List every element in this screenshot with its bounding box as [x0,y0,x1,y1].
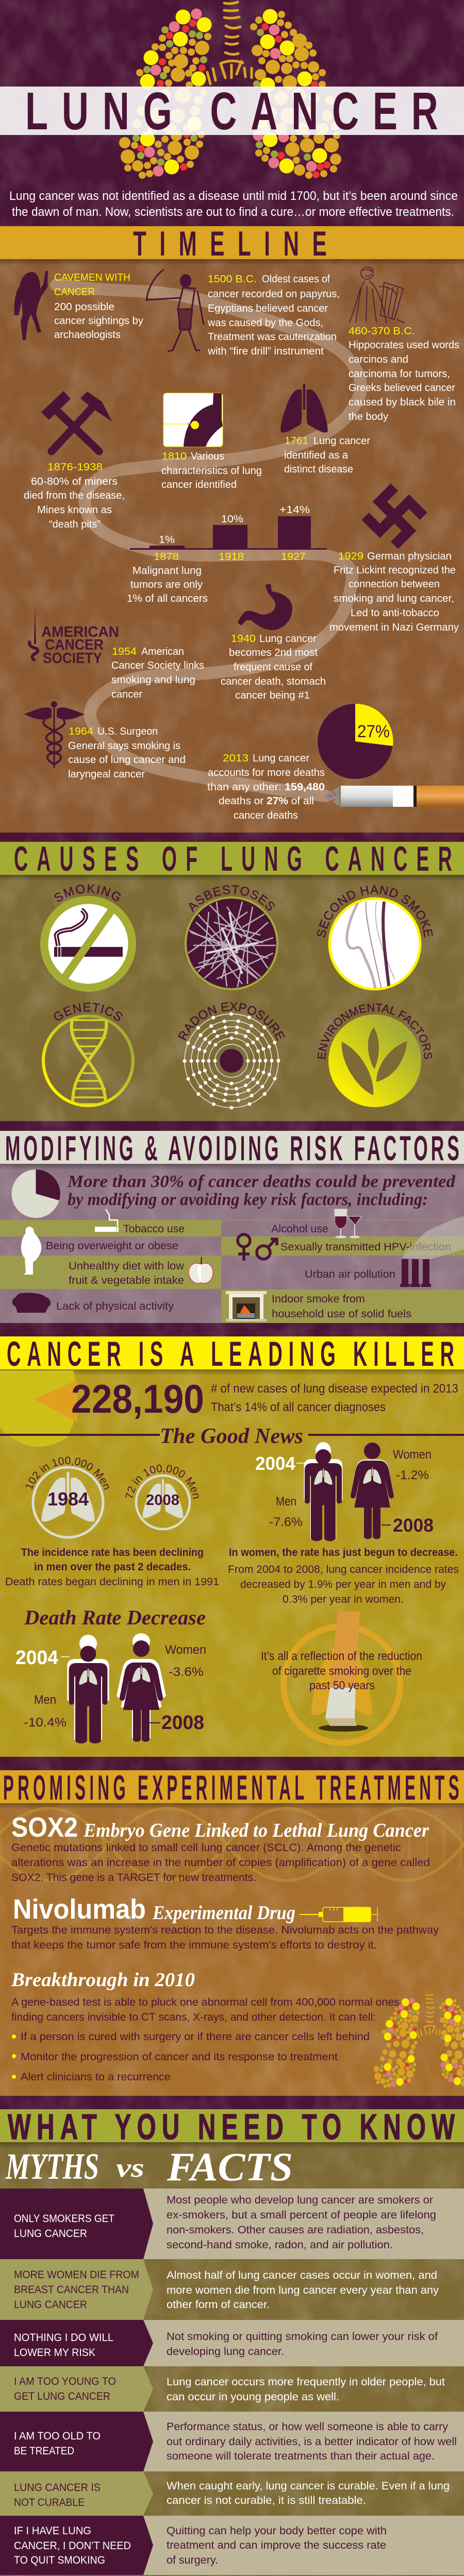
panel: myths table [0,2189,464,2575]
text: incidence in men: Death rates began declining in men in 1991 [5,1576,219,1588]
text: Nivolumab: Targets the immune system's reaction to the disease. Nivolumab acts on the pathway [11,1924,439,1936]
icon: genetics DNA [42,1003,135,1107]
myth 2: MORE WOMEN DIE FROM [14,2269,139,2281]
text: 1761: 1761 [285,435,308,447]
icon: asbestos [185,885,278,990]
text: 1876-1938 [24,462,125,530]
myth 7 [14,2525,387,2566]
text: malignant tumors: Malignant lung [132,565,202,577]
text: 1954: 1954 [112,646,137,657]
chart: 2008 lungs circle [125,1464,199,1530]
chart: 1984 lungs circle: 1984 [47,1488,89,1510]
text: 2013: than any other: 159,480 [207,782,325,793]
text: 1929: movement in Nazi Germany [329,622,459,633]
shadow strips [0,259,464,265]
text: cavemen: cancer sightings by [54,315,143,327]
text: 1929: smoking and lung cancer, [334,593,454,604]
shadow strips [0,1369,464,1376]
text: 1929: Fritz Lickint recognized the [334,565,456,576]
text: malignant tumors: tumors are only [130,579,203,590]
text: 1940: 1940 [231,633,256,645]
heading: timeline: TIMELINE [133,224,327,263]
text: SOX2: Embryo Gene Linked to Lethal Lung Cancer [83,1820,429,1841]
icon: syringe [300,1907,377,1922]
text: 1964: laryngeal cancer [68,769,145,780]
icon: radon atom: RADON EXPOSURE [178,1002,285,1041]
myth 6 [14,2480,450,2509]
text: risk factor labels [46,1223,451,1320]
icon: overweight figure [21,1227,41,1275]
heading band: cancer is a leading killer [0,1336,464,1369]
text: 2013: cancer deaths [234,810,298,821]
title: LUNG CANCER [25,81,438,141]
text: risk factor labels: Being overweight or obese [46,1240,178,1252]
text: 1876-1938: Mines known as [37,504,112,516]
myth 5: Performance status, or how well someone is able to carry [167,2421,449,2433]
text: 1500 BC: Egyptians believed cancer [208,303,328,314]
chart: 1984 lungs circle: 102 in 100,000 Men [26,1456,109,1490]
text: breakthrough in 2010: A gene-based test is able to pluck one abnormal cell from 400,000 normal ones [11,1996,400,2008]
chart: death rate figures: Men [34,1693,56,1707]
text: risk factor labels: Lack of physical activity [56,1300,174,1312]
shadow strips [0,1803,464,1809]
text: 1876-1938: “death pits” [49,519,101,530]
text: 1761 [284,435,370,475]
decoration: DNA background [0,1808,464,1880]
text: 1761: Lung cancer [313,435,370,447]
text: 1940: cancer death, stomach [221,676,326,687]
text: 1954: Cancer Society links [111,660,204,671]
text: incidence in women: decreased by 1.9% per year in men and by [240,1579,446,1590]
heading: death rate decrease: Death Rate Decrease [24,1606,206,1629]
panel: causes background [0,875,464,1121]
myth 3: Not smoking or quitting smoking can lower your risk of [167,2331,438,2343]
myth 7: CANCER, I DON’T NEED [14,2540,131,2552]
icon: small lungs [373,1994,464,2088]
text: reflection of smoking reduction: It’s all a reflection of the reduction [261,1649,422,1663]
text: preventable deaths statement: More than 30% of cancer deaths could be prevented [67,1172,456,1191]
text: reflection of smoking reduction [261,1649,422,1692]
text: 1929: 1929 [338,551,363,562]
text: 1940 [221,633,326,701]
heading: modifying risk factors: MODIFYING & AVOIDING RISK FACTORS [5,1129,459,1168]
icon: caduceus [24,701,85,768]
icon: smokestacks with smoke [400,1216,464,1287]
myth 5: out ordinary daily activities, is a better indicator of how well [167,2436,457,2448]
statistic: 228,190: 228,190 [71,1376,204,1421]
text: 1500 BC: 1500 B.C. [208,274,257,285]
chart: incidence man and woman figures: Men [276,1495,296,1509]
icon: smoking: SMOKING [55,884,121,902]
shadow strips [0,1164,464,1170]
icon: egyptian figure [146,269,204,351]
text: risk factor labels: Alcohol use [271,1223,328,1235]
heading: myths vs facts: MYTHS [5,2146,99,2187]
myth 4: Lung cancer occurs more frequently in older people, but [167,2376,445,2388]
icon: asbestos: ASBESTOSES [189,885,275,912]
icon: environmental leaf [318,1004,432,1107]
bar chart: malignant lung tumors: 1918 [219,551,244,563]
text: cavemen: CAVEMEN WITH [54,272,130,283]
icon: crossed mining hammers [41,391,112,451]
icon: American Cancer Society logo: CANCER [45,637,104,653]
text: 1810: 1810 [162,451,187,462]
text: 1810: Various [191,451,224,462]
panel: leading killer background [0,1369,464,1757]
text: 1876-1938: 60-80% of miners [31,476,118,487]
icon: apple [189,1257,213,1283]
text: 2013: Lung cancer [253,753,309,764]
icon: white cigarette [95,1209,119,1232]
myth 4 [14,2376,445,2403]
intro text: Lung cancer was not identified as a disease until mid 1700, but it’s been around since [9,189,458,203]
panel: treatments background [0,1803,464,2096]
text: risk factor labels: household use of solid fuels [272,1308,411,1320]
text: 1954: American [141,646,184,657]
icon: lungs illustration [119,2,341,179]
heading: myths vs facts [5,2144,293,2189]
myth 5: BE TREATED [14,2445,74,2457]
bar chart: malignant lung tumors: +14% [279,504,310,516]
myth 7: Quitting can help your body better cope with [167,2525,387,2537]
text: malignant tumors: 1% of all cancers [127,593,208,604]
text: SOX2: SOX2 [11,1812,78,1843]
icon: gender symbols [238,1234,277,1261]
text: 2013: accounts for more deaths [208,767,325,778]
text: breakthrough in 2010 [11,1969,400,2083]
myth 3: LOWER MY RISK [14,2347,95,2359]
myth 5: someone will tolerate treatments than their actual age. [167,2450,435,2462]
smoke trail [56,285,361,796]
myth 4: GET LUNG CANCER [14,2391,110,2402]
text: 1500 BC: with “fire drill” instrument [207,346,324,357]
heading band: treatments [0,1770,464,1803]
icon: radon atom [178,1002,285,1110]
pie chart: 27% of cancer deaths [318,704,393,779]
myth 6: LUNG CANCER IS [14,2482,101,2494]
intro text [9,189,458,219]
bar chart: malignant lung tumors: 1927 [281,551,306,563]
chart: death rate figures: Women [165,1643,206,1657]
myth 7: TO QUIT SMOKING [14,2554,105,2566]
myth 3: NOTHING I DO WILL [14,2332,113,2344]
myth 1: Most people who develop lung cancer are smokers or [167,2194,433,2206]
text: risk factor labels: Sexually transmitted HPV-infection [280,1241,451,1253]
text: malignant tumors [127,565,208,604]
text: 460-370 BC: 460-370 B.C. [349,326,415,337]
chart: incidence man and woman figures: 2008 [393,1515,434,1536]
myth 2: other form of cancer. [167,2299,270,2311]
text: 460-370 BC [349,326,459,422]
text: 1954: smoking and lung [111,674,195,686]
text: 1929 [329,551,459,633]
icon: cigarette [324,786,464,807]
text: Nivolumab [11,1894,439,1951]
heading band: timeline [0,226,464,259]
icon: American Cancer Society logo [29,606,119,667]
heading band: causes [0,842,464,875]
text: 1500 BC: cancer recorded on papyrus, [208,289,340,300]
myth 6: When caught early, lung cancer is curable. Even if a lung [167,2480,450,2492]
myth 1: second-hand smoke, radon, and air pollution. [167,2239,393,2251]
panel: hero background [0,0,464,226]
text: cavemen: 200 possible [54,301,114,313]
text: cavemen: archaeologists [54,329,121,341]
text: 460-370 BC: the body [349,411,388,422]
myth 1: ONLY SMOKERS GET [14,2213,114,2225]
text: reflection of smoking reduction: past 50 years [309,1679,375,1692]
chart: incidence man and woman figures: 2004 [255,1453,295,1474]
text: 1876-1938: died from the disease, [24,490,125,501]
chart: death rate figures [15,1633,206,1743]
text: preventable deaths statement: by modifying or avoiding key risk factors, including: [68,1190,428,1209]
text: SOX2 [11,1812,430,1884]
text: 1964: cause of lung cancer and [68,754,186,766]
heading: causes of lung cancer: CAUSES OF LUNG CANCER [14,839,452,878]
text: 1500 BC: Treatment was cauterization [208,331,337,343]
panel: risk factor rows [0,1220,464,1323]
chart: 1984 lungs circle [26,1456,109,1538]
text: 1929: connection between [349,579,440,590]
myth 5: I AM TOO OLD TO [14,2430,101,2442]
chart: death rate figures: 2008 [161,1712,204,1734]
myth 4: can occur in young people as well. [167,2391,339,2403]
text: 1940: becomes 2nd most [229,647,318,658]
myth 2: BREAST CANCER THAN [14,2284,129,2296]
heading: cancer is a leading killer: CANCER IS A LEADING KILLER [7,1334,454,1374]
bar chart: malignant lung tumors: 1878 [154,551,179,563]
text: Nivolumab: Experimental Drug [152,1902,295,1924]
heading: myths vs facts: vs [116,2154,144,2183]
text: Nivolumab: that keeps the tumor safe from the immune system's efforts to destroy it. [11,1939,377,1951]
chart: death rate figures: -10.4% [24,1716,67,1730]
text: incidence in women: In women, the rate has just begun to decrease. [229,1547,458,1558]
bar chart: malignant lung tumors: 10% [221,514,243,525]
text: incidence in women: From 2004 to 2008, lung cancer incidence rates [228,1564,459,1575]
text: reflection of smoking reduction: of cigarette smoking over the [272,1664,411,1677]
text: 460-370 BC: Greeks believed cancer [349,382,455,394]
heading band: what you need to know [0,2109,464,2142]
text: risk factor labels: Urban air pollution [305,1268,395,1280]
icon: genetics DNA: GENETICS [54,1003,123,1021]
text: 1761: identified as a [284,450,349,461]
text: 1964: U.S. Surgeon [97,726,158,737]
heading band: risk factors [0,1131,464,1164]
icon: caveman [14,271,48,340]
icon: second hand smoke: SECOND HAND SMOKE [317,885,433,938]
text: SOX2: Genetic mutations linked to small cell lung cancer (SCLC). Among the genetic [11,1842,401,1854]
myth 7: of surgery. [167,2554,218,2566]
text: SOX2: alterations was an increase in the number of copies (amplification) of a gene called [11,1857,430,1869]
text: breakthrough in 2010: finding cancers invisible to CT scans, X-rays, and other detection. It can tell: [11,2011,376,2023]
myth 2: LUNG CANCER [14,2299,87,2311]
chart: 2008 lungs circle: 2008 [146,1492,179,1509]
text: 1810: cancer identified [161,479,237,490]
text: cavemen: CANCER [54,286,95,298]
decoration: arrow and circle [0,1370,77,1447]
icon: stubbed cigarette in no-lung circle [284,1612,400,1743]
text: breakthrough in 2010: Breakthrough in 2010 [11,1969,195,1991]
text: cavemen [54,272,143,341]
shadow strips [0,875,464,881]
icon: sofa [12,1293,51,1313]
icon: greek figures [350,267,405,324]
text: statistic description: That’s 14% of all cancer diagnoses [211,1400,386,1414]
text: incidence in men: The incidence rate has been declining [21,1547,204,1558]
myth 6: NOT CURABLE [14,2497,85,2509]
text: 1954 [111,646,204,700]
text: risk factor labels: Unhealthy diet with low [69,1260,185,1272]
icon: second hand smoke [317,885,433,990]
icon: lung x-ray box [163,393,223,447]
myth 7: treatment and can improve the success rate [167,2539,386,2551]
text: breakthrough in 2010: Alert clinicians to a recurrence [21,2071,171,2083]
bar chart: malignant lung tumors [130,504,327,563]
text: incidence in men: in men over the past 2 decades. [34,1561,191,1573]
icon: stomach [238,584,292,630]
text: breakthrough in 2010: If a person is cured with surgery or if there are cancer cells left behind [21,2031,370,2043]
myth 1: non-smokers. Other causes are radiation, asbestos, [167,2224,424,2236]
text: 1810: characteristics of lung [161,465,262,477]
text: risk factor labels: Indoor smoke from [272,1293,365,1305]
text: 1929: German physician [367,551,452,562]
icon: smoking [40,884,136,992]
icon: wine glasses [335,1209,361,1239]
text: Nivolumab: Nivolumab [13,1894,146,1925]
icon: fireplace [226,1291,267,1321]
text: breakthrough in 2010: Monitor the progression of cancer and its response to treatment [21,2051,338,2063]
text: 1929: Led to anti-tobacco [351,607,439,619]
chart: incidence man and woman figures: -1.2% [396,1468,429,1482]
pie chart: 30 percent preventable [11,1170,60,1218]
text: SOX2: SOX2. This gene is a TARGET for new treatments. [11,1872,256,1884]
myth 5 [14,2421,457,2462]
myth 2: more women die from lung cancer every year than any [167,2284,439,2296]
chart: death rate figures: 2004 [15,1647,58,1669]
text: 1876-1938: 1876-1938 [47,462,103,473]
myth 1 [14,2194,436,2251]
icon: American Cancer Society logo: SOCIETY [43,650,102,667]
text: 1810 [161,451,262,490]
icon: lungs silhouette [280,384,328,433]
text: incidence in women: 0.3% per year in women. [283,1594,404,1605]
text: 1500 BC [207,274,340,357]
icon: American Cancer Society logo: AMERICAN [41,624,119,640]
panel: timeline background [0,259,464,833]
text: 2013 [207,753,325,821]
text: 1940: cancer being #1 [235,690,310,701]
myth 3 [14,2331,438,2359]
myth 3: developing lung cancer. [167,2346,284,2358]
myth 6: cancer is not curable, it is still treatable. [167,2495,366,2506]
text: 1500 BC: Oldest cases of [262,274,330,285]
text: 1940: Lung cancer [259,633,317,645]
heading: the good news [0,1425,464,1448]
text: 2013: 2013 [223,753,248,764]
text: preventable deaths statement [67,1172,456,1209]
heading: the good news: The Good News [160,1425,303,1448]
text: 460-370 BC: carcinos and [349,354,408,365]
myth 1: ex-smokers, but a small percent of people are lifelong [167,2209,436,2221]
myth 4: I AM TOO YOUNG TO [14,2376,116,2387]
text: 1761: distinct disease [284,464,353,475]
chart: incidence man and woman figures: -7.6% [269,1515,303,1529]
myth 7: IF I HAVE LUNG [14,2525,91,2537]
icon: historical Nazi-era symbol [365,487,424,546]
text: 1964: General says smoking is [68,740,180,752]
text: incidence in men [5,1547,219,1588]
myth 1: LUNG CANCER [14,2228,87,2240]
title band [0,87,464,135]
chart: incidence man and woman figures [255,1442,434,1541]
separator stripes [0,833,464,2576]
text: 1940: frequent cause of [234,662,312,673]
myth 2: Almost half of lung cancer cases occur in women, and [167,2269,437,2281]
text: statistic description [211,1382,458,1414]
heading: myths vs facts: FACTS [167,2144,293,2189]
text: 460-370 BC: carcinoma for tumors, [349,368,450,380]
text: risk factor labels: Tobacco use [123,1223,185,1235]
myth 2 [14,2269,439,2311]
heading: promising experimental treatments: PROMISING EXPERIMENTAL TREATMENTS [3,1769,459,1807]
text: incidence in women [228,1547,459,1605]
text: 1954: cancer [111,689,142,700]
pie chart: 27% of cancer deaths: 27% [357,722,390,741]
chart: death rate figures: -3.6% [169,1665,204,1679]
text: 2013: deaths or 27% of all [219,795,314,807]
icon: environmental leaf: ENVIRONMENTAL FACTORS [318,1004,432,1059]
chart: 2008 lungs circle: 72 in 100,000 Men [125,1464,199,1499]
text: 460-370 BC: Hippocrates used words [349,340,459,351]
panel: risk factors background [0,1164,464,1323]
chart: incidence man and woman figures: Women [393,1448,432,1462]
text: 1964 [68,726,186,780]
text: 460-370 BC: caused by black bile in [349,397,456,408]
panel: myths background [0,2142,464,2576]
bar chart: malignant lung tumors: 1% [159,534,175,546]
heading: what you need to know: WHAT YOU NEED TO KNOW [8,2107,455,2147]
shadow strips [0,2142,464,2148]
text: 1964: 1964 [69,726,93,737]
text: risk factor labels: fruit & vegetable intake [69,1275,184,1286]
text: 1500 BC: was caused by the Gods, [207,317,323,329]
